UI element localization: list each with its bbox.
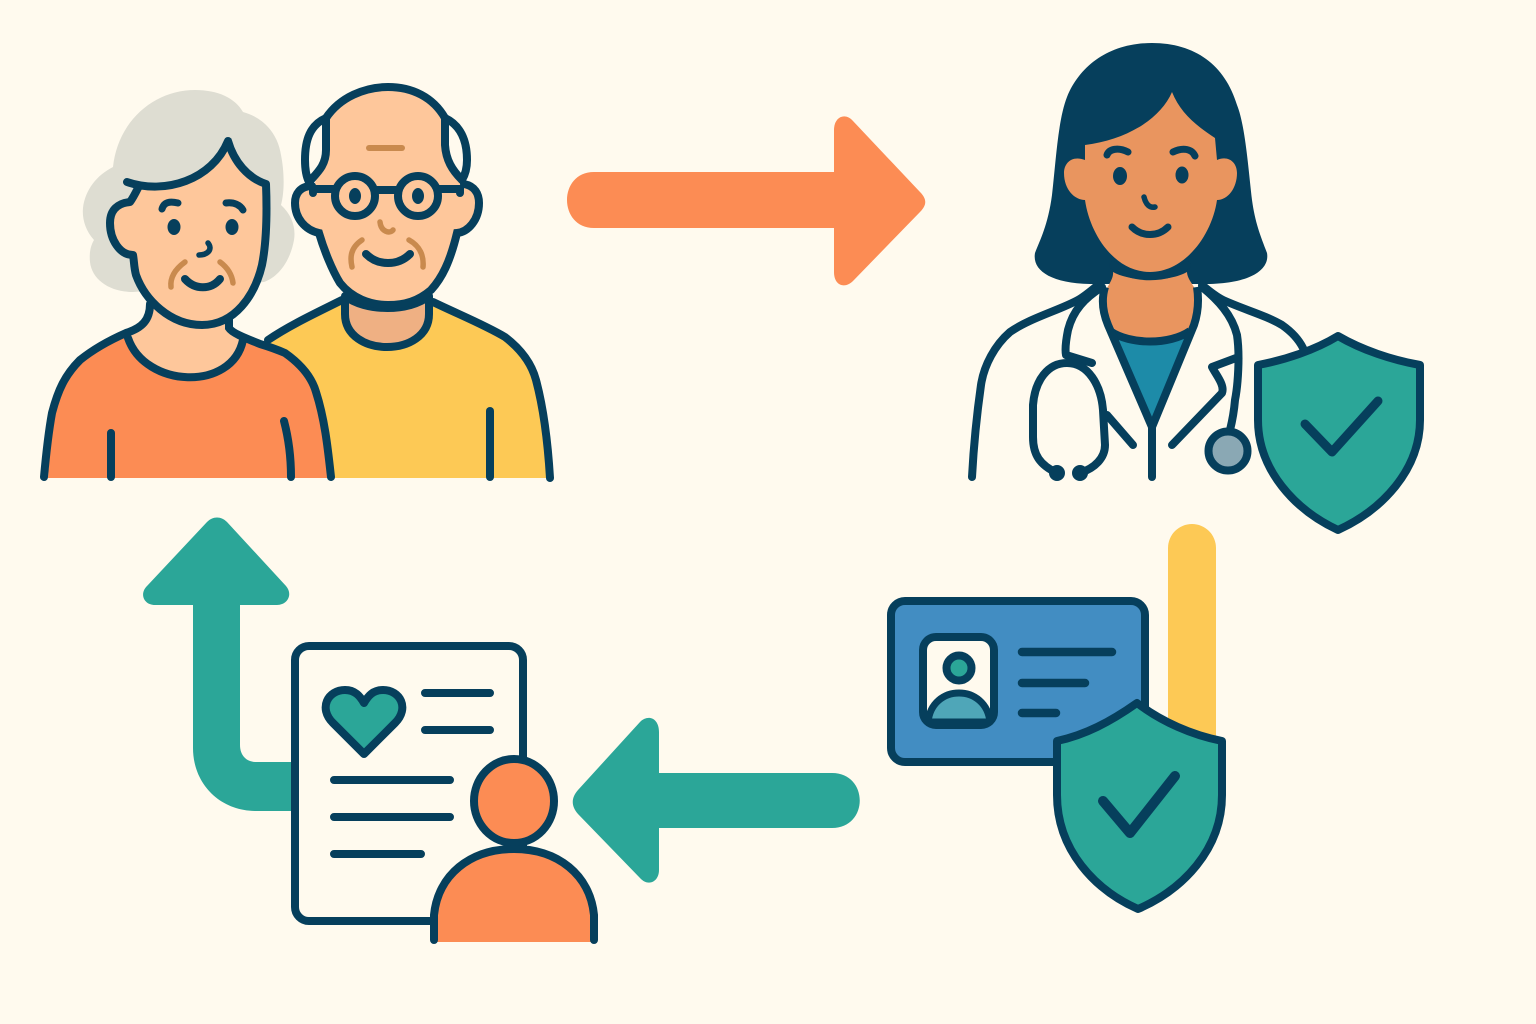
- woman hair: [83, 90, 294, 292]
- man body: [268, 296, 550, 478]
- doctor coat: [972, 272, 1303, 477]
- woman body: [44, 300, 331, 478]
- stethoscope: [1033, 363, 1248, 477]
- arrow: teal to document: [573, 718, 860, 883]
- icon: medical document with patient: [295, 646, 594, 942]
- document: [295, 646, 523, 921]
- icon: older couple: [44, 87, 550, 478]
- shield with check: [1258, 336, 1420, 530]
- woman head: [110, 141, 267, 325]
- ID card: [891, 601, 1145, 762]
- arrow: orange to doctor: [567, 116, 925, 285]
- doctor hair: [1035, 43, 1267, 284]
- arrow: yellow connector: [1168, 524, 1216, 745]
- person: [434, 759, 594, 942]
- doctor face: [1064, 92, 1237, 276]
- arrow: teal up to couple: [143, 518, 295, 811]
- icon: doctor with shield: [972, 43, 1420, 530]
- icon: ID card with shield: [891, 601, 1222, 909]
- shield with check: [1057, 703, 1222, 909]
- man head: [295, 87, 479, 305]
